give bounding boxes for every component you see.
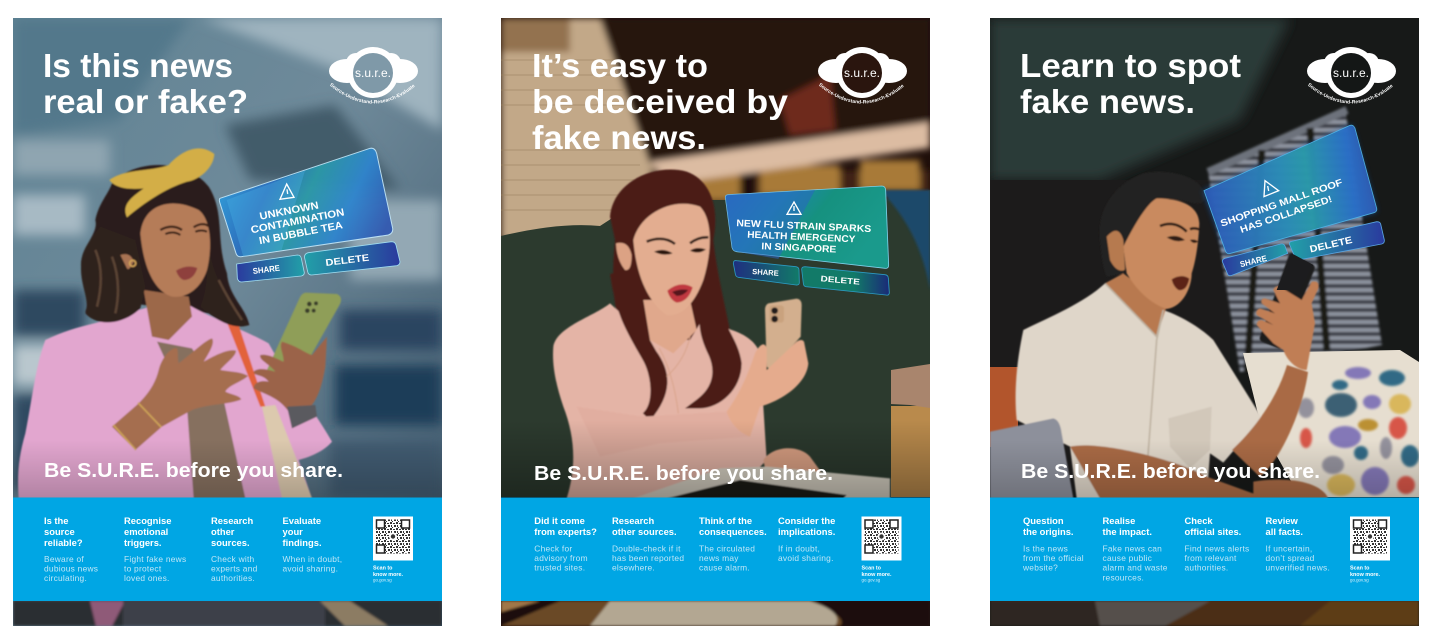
hand <box>1256 281 1319 370</box>
tip: Evaluate your findings. <box>282 515 342 574</box>
neck <box>643 300 697 353</box>
scan caption: go.gov.sg <box>862 578 881 582</box>
photo background: cafe interior <box>501 18 930 626</box>
scan caption <box>373 566 403 582</box>
illustration: man looking at a phone <box>990 172 1328 498</box>
tip: Is the source reliable?: circulating. <box>44 573 87 583</box>
bottom shading <box>501 420 930 500</box>
tip: Consider the implications.: If in doubt, <box>778 544 820 554</box>
tagline: Be S.U.R.E. before you share. <box>534 462 833 485</box>
poster 3: Learn to spot fake news. <box>990 18 1419 626</box>
tip: Check official sites.: Find news alerts <box>1184 544 1249 554</box>
icon: warning triangle <box>1264 181 1279 197</box>
tip: Research other sources.: authorities. <box>211 573 255 583</box>
news alert card: SHARE <box>752 267 779 278</box>
hand on chest <box>139 338 248 427</box>
blue tips band <box>501 498 930 601</box>
tip: Think of the consequences.: news may <box>699 553 739 563</box>
tip: Is the source reliable?: Is the <box>44 515 68 526</box>
news alert card <box>1203 125 1384 290</box>
tip: Think of the consequences. <box>699 515 767 573</box>
tip: Review all facts.: all facts. <box>1266 526 1303 537</box>
phone top over button <box>1277 253 1313 290</box>
facial features <box>160 224 209 230</box>
news alert card <box>725 186 889 295</box>
news alert card: SHOPPING MALL ROOF <box>1219 177 1344 230</box>
tip: Did it come from experts?: Did it come <box>534 515 585 526</box>
scan caption: go.gov.sg <box>1350 578 1369 582</box>
headline <box>45 53 246 114</box>
hair locks over blouse <box>615 273 737 417</box>
orange sofa <box>990 367 1018 447</box>
neck <box>144 290 192 340</box>
scan caption: go.gov.sg <box>373 578 392 582</box>
tip: Research other sources.: Research <box>612 515 654 526</box>
news alert card: UNKNOWN <box>259 200 320 223</box>
tip: Think of the consequences.: Think of the <box>699 515 752 526</box>
news alert card: IN BUBBLE TEA <box>258 220 344 247</box>
tagline: Be S.U.R.E. before you share. <box>1021 460 1320 483</box>
laptop <box>990 418 1073 498</box>
s.u.r.e. logo: Source-Understand-Research-Evaluate <box>330 83 415 104</box>
scan caption: Scan to <box>373 566 393 572</box>
bottom photo strip <box>13 600 442 626</box>
news alert card: DELETE <box>1309 235 1354 255</box>
tip: Question the origins.: from the official <box>1023 553 1084 563</box>
tip: Research other sources.: other sources. <box>612 526 677 537</box>
scan caption: Scan to <box>862 566 882 572</box>
tip: Recognise emotional triggers.: Recognise <box>124 515 171 526</box>
s.u.r.e. logo <box>1307 47 1396 104</box>
facial features <box>1160 224 1199 232</box>
tip: Check official sites.: official sites. <box>1184 526 1241 537</box>
share button <box>1222 244 1288 276</box>
tip: Think of the consequences.: consequences. <box>699 526 767 537</box>
illustration: woman looking at a phone <box>553 170 890 498</box>
tip: Question the origins.: website? <box>1022 563 1058 573</box>
tip: Consider the implications. <box>778 515 835 563</box>
necklace <box>659 337 690 413</box>
shirt <box>18 298 332 498</box>
tip: Question the origins. <box>1022 515 1084 573</box>
bottom photo strip <box>501 600 930 626</box>
tip: Recognise emotional triggers.: triggers. <box>124 537 162 548</box>
forearms <box>1070 365 1328 498</box>
tip: Review all facts.: unverified news. <box>1266 563 1330 573</box>
tip: Think of the consequences.: The circulated <box>699 544 755 554</box>
s.u.r.e. logo <box>818 47 907 104</box>
left forearm and bracelets <box>112 403 162 450</box>
news alert card: HAS COLLAPSED! <box>1239 194 1334 236</box>
share button <box>733 261 799 285</box>
face <box>140 203 210 297</box>
tip: Check official sites.: Check <box>1184 515 1213 526</box>
tip: Is the source reliable?: source <box>44 526 75 537</box>
arm sleeve <box>577 407 750 457</box>
tip: Recognise emotional triggers.: Fight fake news <box>124 554 186 564</box>
delete button <box>1289 222 1384 260</box>
tip: Check official sites.: authorities. <box>1184 563 1228 573</box>
hand holding phone <box>727 340 808 437</box>
news alert card: CONTAMINATION <box>250 207 345 236</box>
tip: Did it come from experts?: trusted sites. <box>534 563 585 573</box>
polka dot pillow <box>1243 350 1419 497</box>
hand with phone and watch <box>254 337 327 412</box>
hair back <box>81 165 249 326</box>
tip: Research other sources. <box>612 515 684 573</box>
tip: Recognise emotional triggers.: loved ones. <box>124 573 170 583</box>
hair <box>609 168 730 341</box>
neck <box>1105 273 1167 337</box>
tip: Is the source reliable?: Beware of <box>44 554 84 564</box>
face <box>1123 198 1199 309</box>
news alert card: IN SINGAPORE <box>761 241 837 256</box>
blouse and arm <box>553 303 767 498</box>
shirt <box>1016 283 1262 498</box>
news alert card: HEALTH EMERGENCY <box>747 230 856 245</box>
hair front curls <box>80 243 248 328</box>
tip: Realise the impact.: the impact. <box>1102 526 1152 537</box>
s.u.r.e. logo <box>329 47 418 104</box>
tip: Research other sources.: Double-check if it <box>612 544 681 554</box>
tip: Research other sources.: Check with <box>211 554 255 564</box>
scan caption: know more. <box>373 572 403 578</box>
news alert card: DELETE <box>325 253 371 269</box>
s.u.r.e. logo: s.u.r.e. <box>1333 68 1369 80</box>
news alert card: SHARE <box>1239 253 1268 269</box>
hair <box>1100 172 1205 277</box>
table and tablet <box>633 467 890 498</box>
tip: Consider the implications.: Consider the <box>778 515 835 526</box>
tip: Realise the impact. <box>1102 515 1168 582</box>
headline: Is this news <box>43 48 233 85</box>
scan caption: know more. <box>862 572 892 578</box>
tip: Realise the impact.: cause public <box>1102 553 1152 563</box>
tip: Check official sites.: from relevant <box>1184 553 1237 563</box>
tip: Review all facts.: don’t spread <box>1266 553 1315 563</box>
scan caption: know more. <box>1350 572 1380 578</box>
s.u.r.e. logo: s.u.r.e. <box>355 68 391 80</box>
tip: Recognise emotional triggers.: to protect <box>124 564 162 574</box>
window blinds <box>1208 108 1382 372</box>
tip: Check official sites. <box>1184 515 1249 573</box>
news alert card: DELETE <box>820 273 861 287</box>
tip: Did it come from experts?: Check for <box>534 544 572 554</box>
headline: fake news. <box>532 120 706 157</box>
tip: Realise the impact.: Fake news can <box>1102 544 1162 554</box>
tip: Review all facts.: If uncertain, <box>1266 544 1313 554</box>
delete button <box>304 242 400 275</box>
blue tips band <box>13 498 442 601</box>
headline: real or fake? <box>43 84 248 121</box>
bottom photo strip <box>990 600 1419 626</box>
tagline: Be S.U.R.E. before you share. <box>44 459 343 482</box>
tip: Research other sources.: has been reported <box>612 553 684 563</box>
scan caption <box>1350 566 1380 582</box>
tip: Research other sources. <box>211 515 258 583</box>
scan caption: Scan to <box>1350 566 1370 572</box>
tip: Evaluate your findings.: avoid sharing. <box>282 564 338 574</box>
s.u.r.e. logo: Source-Understand-Research-Evaluate <box>819 83 904 104</box>
headline <box>1020 48 1241 121</box>
tip: Evaluate your findings.: When in doubt, <box>282 554 342 564</box>
photo background: dark living room <box>990 18 1419 626</box>
headline: Learn to spot <box>1020 48 1241 85</box>
icon: warning triangle <box>280 184 294 199</box>
blue tips band <box>990 498 1419 601</box>
QR code <box>1350 516 1390 560</box>
news alert card <box>219 148 400 282</box>
green booth seating <box>501 190 930 497</box>
poster 1: Is this news real or fake? <box>13 18 442 626</box>
icon: warning triangle <box>787 202 801 214</box>
headband <box>109 148 214 217</box>
tip: Research other sources.: Research <box>211 515 253 526</box>
tip: Evaluate your findings.: findings. <box>282 537 322 548</box>
tip: Consider the implications.: avoid sharing. <box>778 553 834 563</box>
tip: Recognise emotional triggers. <box>124 515 186 583</box>
face <box>633 204 710 315</box>
phone <box>765 299 802 370</box>
delete button <box>802 267 889 295</box>
other hand on table <box>763 448 823 477</box>
headline <box>532 48 788 157</box>
bottom shading <box>13 450 442 498</box>
tip: Research other sources.: elsewhere. <box>612 563 655 573</box>
tip: Did it come from experts?: advisory from <box>534 553 588 563</box>
bag strap <box>227 323 266 408</box>
tip: Review all facts. <box>1266 515 1330 573</box>
tip: Question the origins.: Question <box>1023 515 1064 526</box>
phone <box>1260 253 1315 349</box>
shirt details <box>1105 283 1163 473</box>
headline: be deceived by <box>532 84 788 121</box>
tip: Research other sources.: sources. <box>211 537 250 548</box>
QR code <box>862 516 902 560</box>
top <box>157 342 245 498</box>
wooden tissue box <box>891 406 930 497</box>
tip: Research other sources.: other <box>211 526 235 537</box>
tip: Did it come from experts? <box>534 515 597 573</box>
s.u.r.e. logo: s.u.r.e. <box>844 68 880 80</box>
tip: Realise the impact.: resources. <box>1102 572 1144 582</box>
news alert card: NEW FLU STRAIN SPARKS <box>736 218 872 235</box>
scan caption <box>862 566 892 582</box>
facial features <box>647 237 708 244</box>
bottom shading <box>990 440 1419 500</box>
illustration: young woman holding a phone <box>18 148 341 498</box>
tip: Evaluate your findings.: Evaluate <box>282 515 321 526</box>
tip: Is the source reliable?: dubious news <box>44 564 98 574</box>
poster 2: It's easy to be deceived by fake news. <box>501 18 930 626</box>
tip: Question the origins.: the origins. <box>1023 526 1074 537</box>
tip: Realise the impact.: Realise <box>1102 515 1135 526</box>
tip: Evaluate your findings.: your <box>282 526 303 537</box>
share button <box>237 255 304 282</box>
tip: Consider the implications.: implications. <box>778 526 835 537</box>
QR code <box>373 516 413 560</box>
tip: Realise the impact.: alarm and waste <box>1102 563 1168 573</box>
s.u.r.e. logo: Source-Understand-Research-Evaluate <box>1308 83 1393 104</box>
tip: Is the source reliable? <box>44 515 98 583</box>
news alert card: SHARE <box>252 263 281 276</box>
tip: Is the source reliable?: reliable? <box>44 537 83 548</box>
tip: Review all facts.: Review <box>1266 515 1299 526</box>
tip: Research other sources.: experts and <box>211 564 258 574</box>
photo background: blurred office building <box>13 18 442 626</box>
tip: Think of the consequences.: cause alarm. <box>699 563 750 573</box>
headline: fake news. <box>1020 84 1195 121</box>
tip: Recognise emotional triggers.: emotional <box>124 526 168 537</box>
phone <box>265 293 341 377</box>
tip: Did it come from experts?: from experts? <box>534 526 597 537</box>
headline: It’s easy to <box>532 48 708 85</box>
tip: Question the origins.: Is the news <box>1023 544 1068 554</box>
